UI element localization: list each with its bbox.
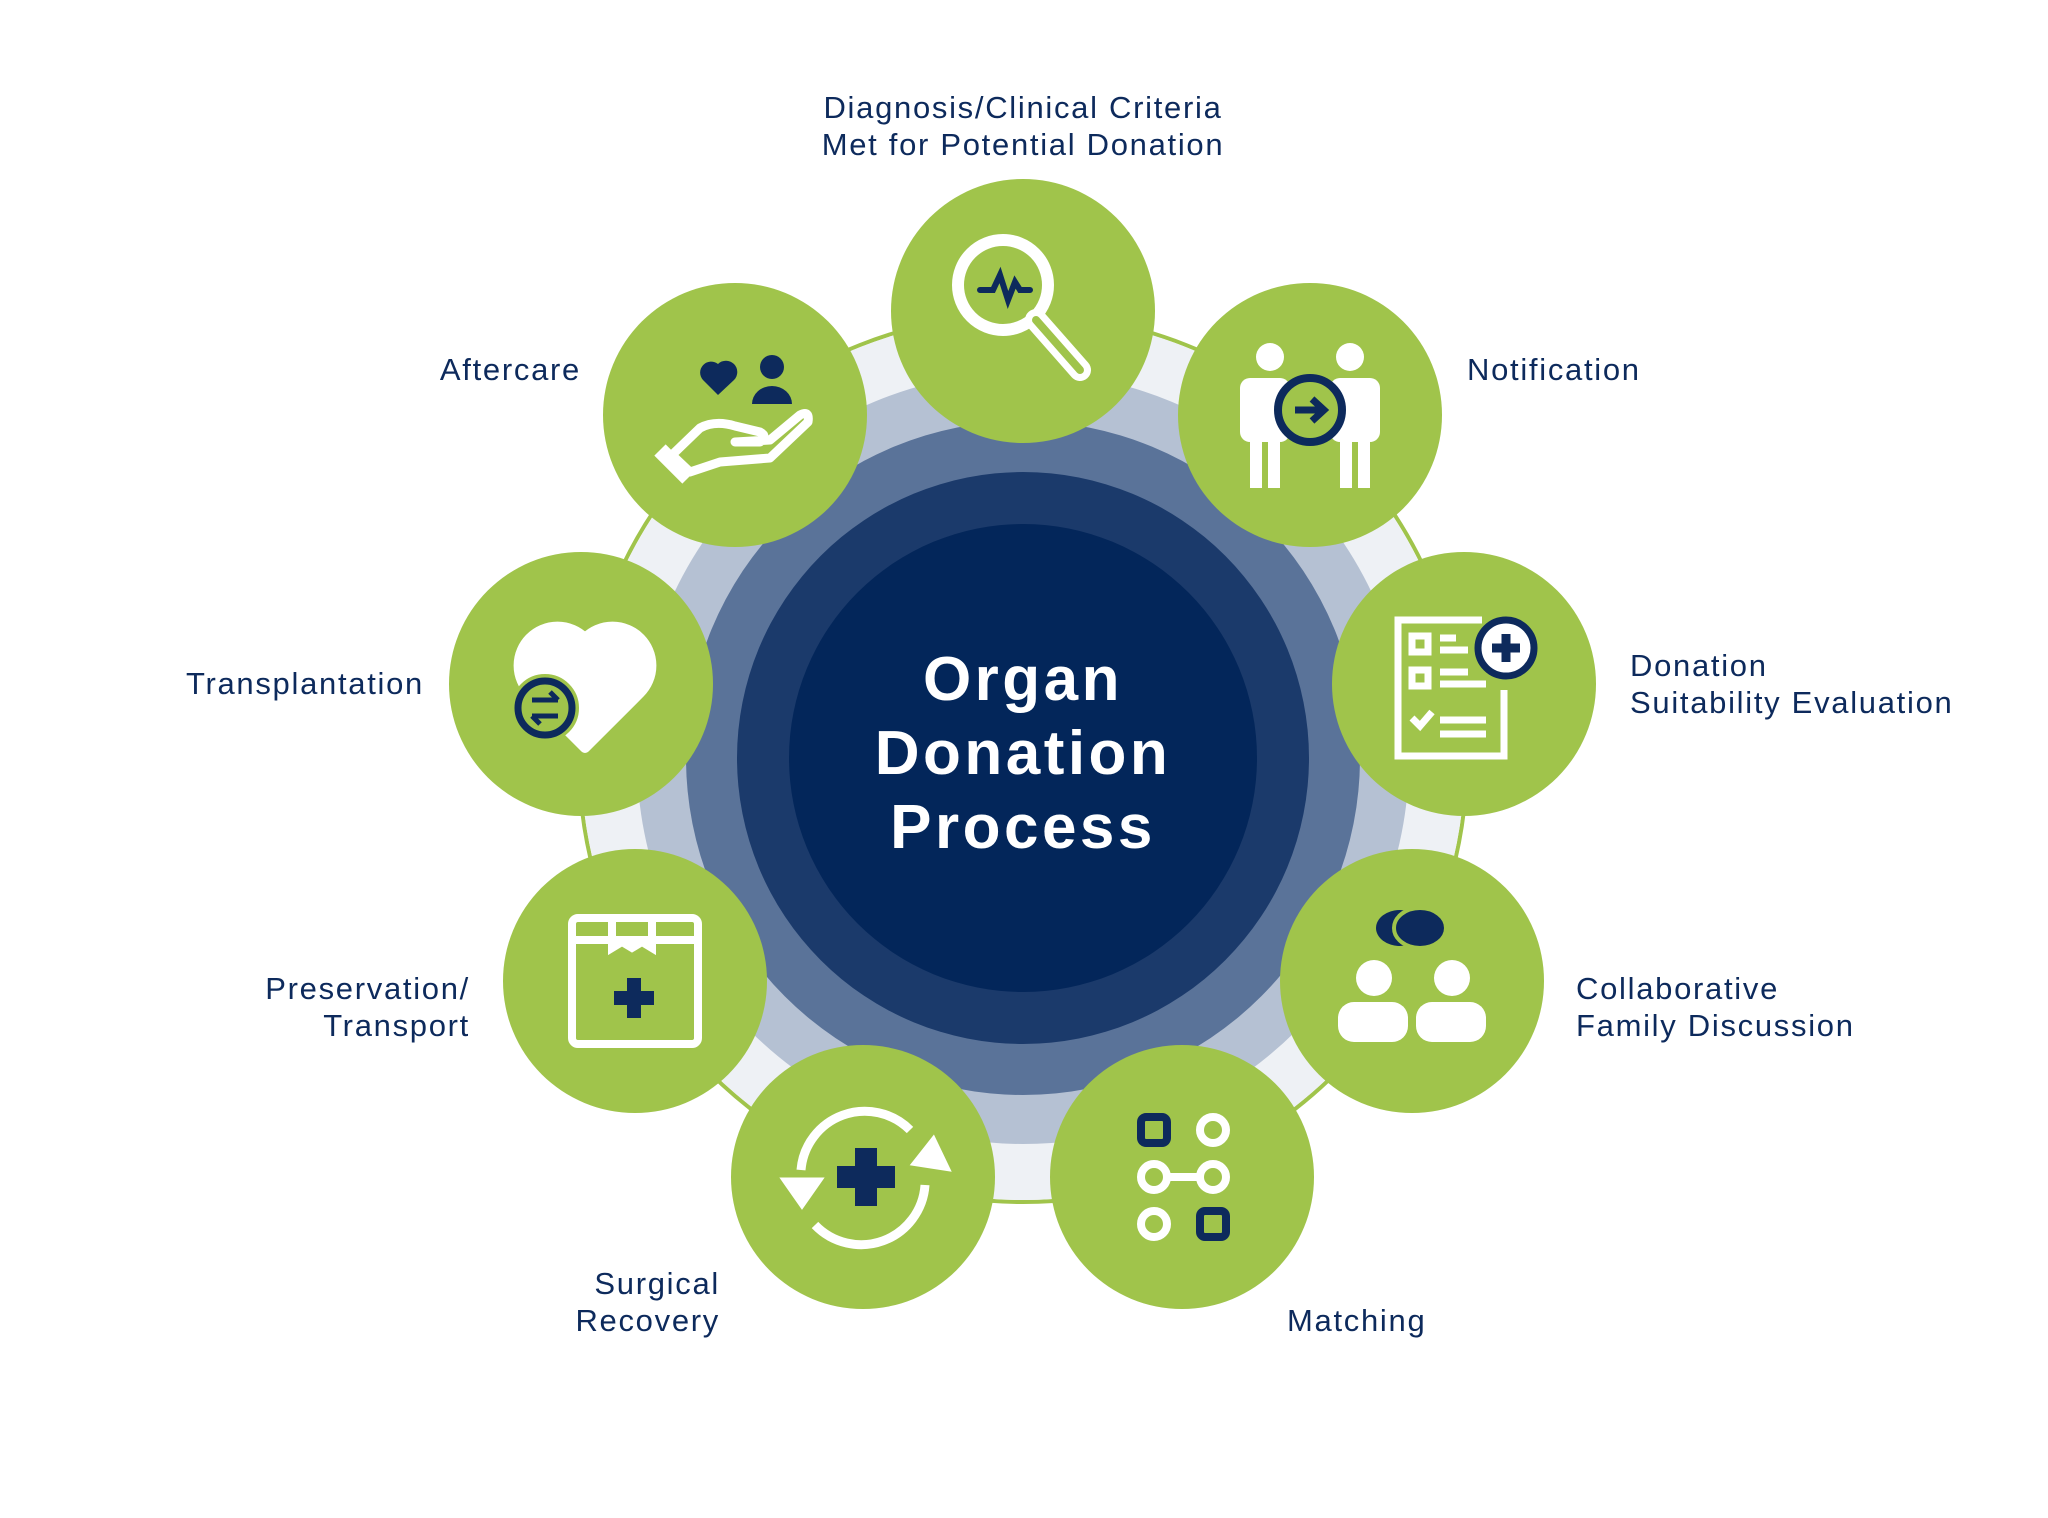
title: Process: [890, 793, 1156, 862]
icon: magnifier: [958, 240, 1080, 370]
icon: medical box: [572, 918, 698, 1044]
labels: Aftercare: [440, 352, 581, 387]
icon: matching grid: [1141, 1117, 1226, 1237]
labels: Preservation/: [265, 971, 470, 1006]
labels: Donation: [1630, 648, 1768, 683]
step: aftercare: [603, 283, 867, 547]
icon: checklist with plus: [1398, 620, 1534, 756]
step: transplantation: [449, 552, 713, 816]
step: matching: [1050, 1045, 1314, 1309]
step: notification: [1178, 283, 1442, 547]
title: [875, 645, 1171, 862]
step: collaborative: [1280, 849, 1544, 1113]
icon: heart with exchange: [515, 627, 651, 748]
icon: cycle with plus: [788, 1111, 944, 1245]
labels: Collaborative: [1576, 971, 1779, 1006]
labels: Matching: [1287, 1303, 1426, 1338]
labels: Transplantation: [186, 666, 424, 701]
background rings: [579, 314, 1467, 1202]
icon: hand with heart and person: [660, 355, 808, 478]
step: diagnosis: [891, 179, 1155, 443]
icon: family discussion: [1338, 908, 1486, 1042]
labels: Notification: [1467, 352, 1641, 387]
labels: Transport: [323, 1008, 470, 1043]
step: suitability: [1332, 552, 1596, 816]
labels: [186, 90, 1953, 1338]
labels: Family Discussion: [1576, 1008, 1855, 1043]
labels: Met for Potential Donation: [822, 127, 1224, 162]
title: Organ: [923, 645, 1123, 714]
step: preservation: [503, 849, 767, 1113]
icon: two people with arrow: [1240, 343, 1380, 488]
labels: Diagnosis/Clinical Criteria: [823, 90, 1223, 125]
labels: Suitability Evaluation: [1630, 685, 1953, 720]
labels: Surgical: [594, 1266, 720, 1301]
labels: Recovery: [575, 1303, 720, 1338]
title: Donation: [875, 719, 1171, 788]
step: surgical: [731, 1045, 995, 1309]
